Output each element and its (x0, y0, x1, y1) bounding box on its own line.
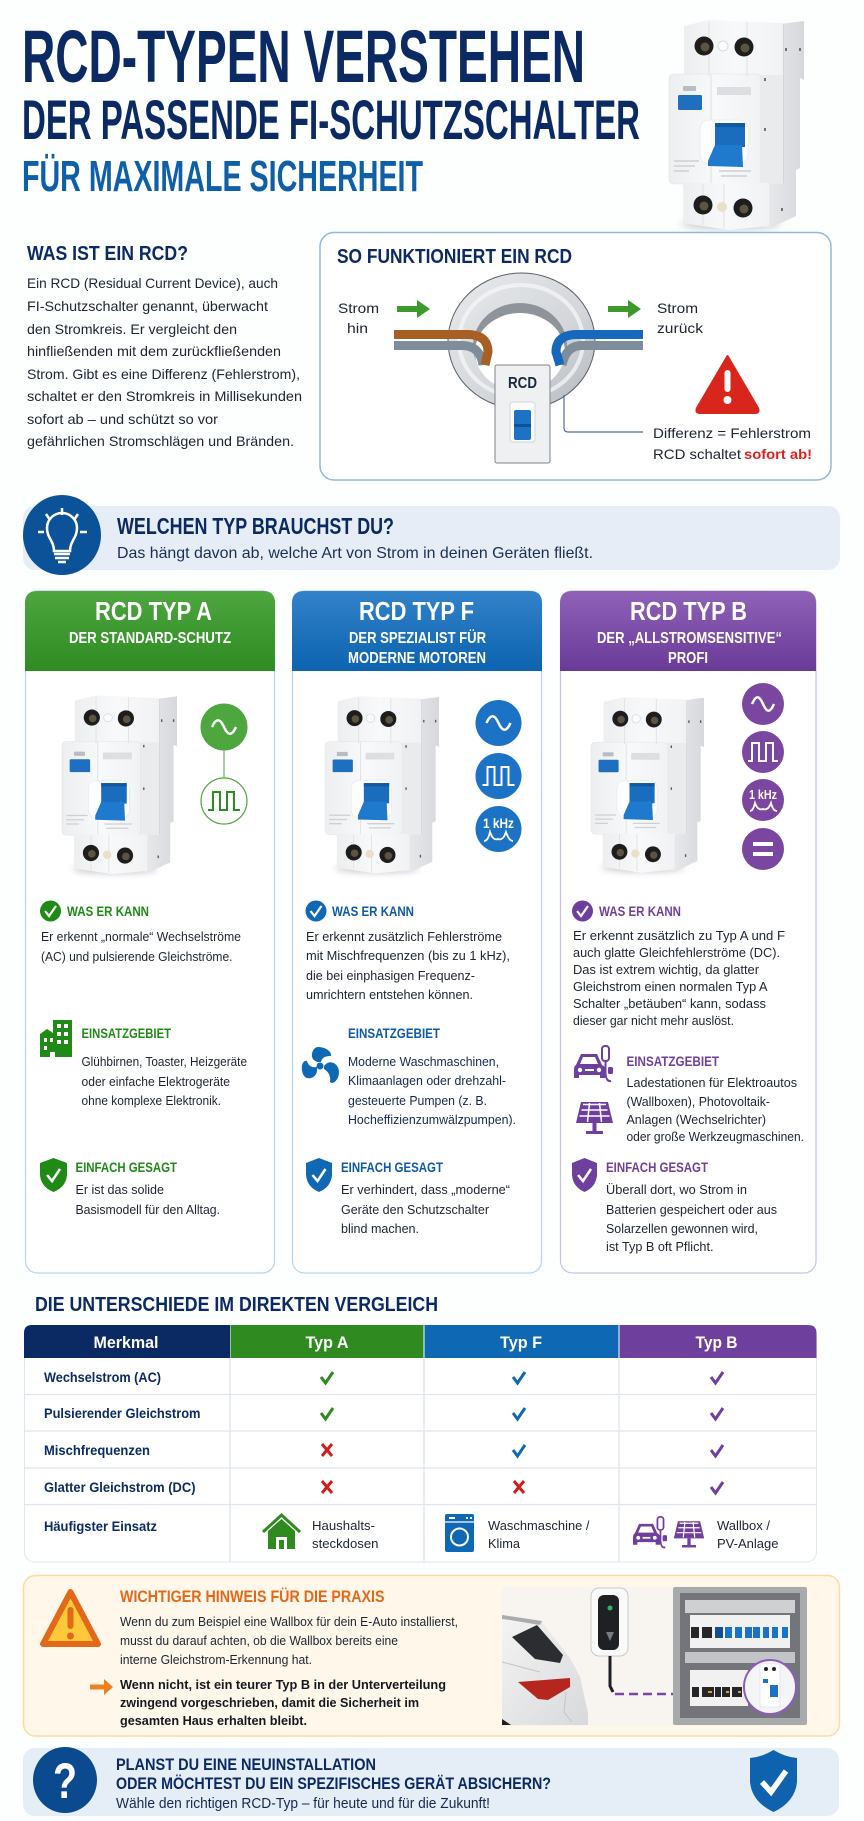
text block: was ist ein RCD (27, 242, 302, 449)
diagram: RCD module: RCD (508, 375, 537, 392)
icon: shield (306, 1158, 332, 1192)
illustration: wallbox and distribution board (502, 1587, 807, 1726)
block: was er kann Typ A: (AC) und pulsierende Gleichströme. (41, 949, 232, 964)
block: einfach gesagt Typ B: Batterien gespeichert oder aus (606, 1202, 777, 1217)
icon: red warning triangle (696, 356, 759, 413)
call to action text: Wähle den richtigen RCD-Typ – für heute und für die Zukunft! (116, 1796, 490, 1812)
icon: e-car (574, 1046, 613, 1081)
icon: fan (302, 1047, 339, 1083)
block: Einsatzgebiet Typ B: (Wallboxen), Photovoltaik- (626, 1094, 770, 1109)
row: Häufigster Einsatz: steckdosen (312, 1536, 378, 1551)
icon: AC, pulsed and mixed frequency waveforms: 1 kHz (483, 816, 514, 831)
hint bold text (120, 1677, 446, 1728)
block: was er kann Typ B (572, 900, 785, 1028)
panel: so funktioniert ein RCD (320, 232, 831, 480)
block: Einsatzgebiet Typ A (40, 1020, 247, 1108)
icon: breaker Typ F (325, 696, 439, 874)
block: Einsatzgebiet Typ F: Klimaanlagen oder drehzahl- (348, 1073, 506, 1088)
header: Typ F: MODERNE MOTOREN (348, 650, 486, 667)
row: Häufigster Einsatz: Häufigster Einsatz (44, 1519, 157, 1534)
callout: fault current: RCD schaltet (653, 446, 741, 462)
row: Häufigster Einsatz: PV-Anlage (717, 1536, 778, 1551)
hint bold text: Wenn nicht, ist ein teurer Typ B in der Unterverteilung (120, 1677, 446, 1692)
dashed connection (615, 1693, 699, 1695)
row: Wechselstrom: Wechselstrom (AC) (44, 1370, 161, 1385)
diagram: toroid ring (448, 273, 595, 409)
block: Einsatzgebiet Typ B: Ladestationen für Elektroautos (626, 1075, 797, 1090)
block: was er kann Typ B: Schalter „betäuben“ kann, sodass (573, 996, 766, 1011)
block: einfach gesagt Typ A: EINFACH GESAGT (76, 1159, 177, 1175)
block: einfach gesagt Typ F: EINFACH GESAGT (341, 1159, 443, 1175)
label: Strom hin: Strom (338, 300, 379, 316)
block: Einsatzgebiet Typ F: EINSATZGEBIET (348, 1025, 440, 1041)
block: einfach gesagt Typ A (40, 1158, 220, 1217)
block: Einsatzgebiet Typ A: ohne komplexe Elektronik. (82, 1093, 221, 1108)
icon: breaker Typ B (591, 697, 704, 873)
header: Typ F (292, 591, 542, 671)
arrow: current in (397, 300, 430, 318)
block: was er kann Typ B: auch glatte Gleichfehlerströme (DC). (573, 945, 780, 960)
icon: solar panel (576, 1102, 613, 1134)
header: Typ B: PROFI (668, 650, 708, 667)
row: Glatter Gleichstrom (44, 1480, 723, 1495)
icon: e-car (633, 1517, 667, 1547)
text block: was ist ein RCD: sofort ab – und schützt so vor (27, 411, 218, 427)
label: Strom zurück (657, 300, 704, 336)
heading: comparison: DIE UNTERSCHIEDE IM DIREKTEN VERGLEICH (35, 1294, 438, 1316)
row: Pulsierender Gleichstrom (44, 1406, 723, 1421)
header: Typ A (25, 591, 275, 671)
callout: fault current (653, 425, 812, 462)
block: einfach gesagt Typ F: Geräte den Schutzschalter (341, 1202, 490, 1217)
hint bold text: gesamten Haus erhalten bleibt. (120, 1713, 307, 1728)
highlighted RCD (744, 1660, 796, 1714)
title (22, 15, 640, 201)
block: Einsatzgebiet Typ B (574, 1046, 804, 1144)
header: Typ F: RCD TYP F (359, 598, 474, 626)
header: Typ B: DER „ALLSTROMSENSITIVE“ (597, 630, 782, 647)
icon: breaker Typ A (62, 695, 177, 874)
icon: AC and pulsed waveforms (200, 704, 248, 824)
text block: was ist ein RCD: schaltet er den Stromkreis in Millisekunden (27, 388, 302, 404)
row: Mischfrequenzen: Mischfrequenzen (44, 1443, 150, 1458)
text block: was ist ein RCD: Strom. Gibt es eine Differenz (Fehlerstrom), (27, 366, 300, 382)
block: was er kann Typ F (306, 900, 510, 1002)
block: was er kann Typ F: die bei einphasigen Frequenz- (306, 968, 475, 983)
block: Einsatzgebiet Typ F: Hocheffizienzumwälzpumpen). (348, 1112, 516, 1127)
wallbox (591, 1588, 628, 1692)
banner text (117, 513, 593, 562)
icon: shield check (750, 1750, 797, 1812)
label: Strom zurück: Strom (657, 300, 698, 316)
label: Strom hin: hin (347, 320, 368, 336)
block: was er kann Typ F: mit Mischfrequenzen (bis zu 1 kHz), (306, 948, 510, 963)
icon: shield (40, 1158, 67, 1192)
hint text: Wenn du zum Beispiel eine Wallbox für dein E-Auto installierst, (120, 1614, 458, 1629)
block: Einsatzgebiet Typ B: Anlagen (Wechselrichter) (626, 1112, 766, 1127)
diagram: incoming wires (394, 334, 488, 365)
row: Pulsierender Gleichstrom: Pulsierender Gleichstrom (44, 1406, 200, 1421)
block: einfach gesagt Typ F (306, 1158, 510, 1236)
block: was er kann Typ A: WAS ER KANN (67, 903, 149, 919)
block: was er kann Typ A (40, 900, 241, 964)
label: Strom hin (338, 300, 379, 336)
hint text: musst du darauf achten, ob die Wallbox bereits eine (120, 1633, 398, 1648)
block: Einsatzgebiet Typ F: gesteuerte Pumpen (z. B. (348, 1093, 487, 1108)
arrow: current out (608, 300, 641, 318)
block: was er kann Typ F: WAS ER KANN (332, 903, 414, 919)
icon: question mark: ? (53, 1753, 77, 1809)
icon: shield (572, 1158, 597, 1192)
block: Einsatzgebiet Typ B: oder große Werkzeugmaschinen. (626, 1129, 804, 1144)
hint text (120, 1587, 458, 1667)
block: Einsatzgebiet Typ A: EINSATZGEBIET (82, 1025, 171, 1041)
table header: Typ F (500, 1333, 542, 1352)
block: was er kann Typ B: Er erkennt zusätzlich zu Typ A und F (573, 928, 785, 943)
header: Typ A: DER STANDARD-SCHUTZ (69, 630, 231, 647)
callout: fault current: Differenz = Fehlerstrom (653, 425, 811, 441)
block: was er kann Typ B: dieser gar nicht mehr auslöst. (573, 1013, 734, 1028)
block: einfach gesagt Typ B (572, 1158, 777, 1254)
block: einfach gesagt Typ B: ist Typ B oft Pflicht. (606, 1239, 714, 1254)
block: einfach gesagt Typ A: Er ist das solide (76, 1182, 164, 1197)
banner text: WELCHEN TYP BRAUCHST DU? (117, 513, 394, 539)
block: was er kann Typ B: WAS ER KANN (599, 903, 681, 919)
row: Häufigster Einsatz: Klima (488, 1536, 521, 1551)
icon: AC, pulsed and mixed frequency waveforms (476, 700, 522, 852)
row: Glatter Gleichstrom: Glatter Gleichstrom (DC) (44, 1480, 196, 1495)
banner text: Das hängt davon ab, welche Art von Strom in deinen Geräten fließt. (117, 545, 593, 562)
icon: AC, pulsed, mixed frequency and DC waveforms (742, 683, 784, 870)
icon: light bulb (23, 495, 101, 575)
car rear (502, 1615, 588, 1725)
table header: Typ A (306, 1333, 348, 1352)
block: einfach gesagt Typ B: EINFACH GESAGT (606, 1159, 708, 1175)
text block: was ist ein RCD: hinfließenden mit dem zurückfließenden (27, 343, 281, 359)
icon: washing machine (445, 1514, 474, 1552)
block: was er kann Typ B: Gleichstrom einen normalen Typ A (573, 979, 768, 994)
call to action text: ODER MÖCHTEST DU EIN SPEZIFISCHES GERÄT ABSICHERN? (116, 1774, 551, 1793)
table header (24, 1325, 816, 1358)
block: einfach gesagt Typ F: blind machen. (341, 1221, 419, 1236)
text block: was ist ein RCD: FI-Schutzschalter genannt, überwacht (27, 298, 268, 314)
diagram: outgoing wires (556, 334, 643, 365)
panel: RCD Typ A (25, 591, 275, 1273)
icon: building (40, 1020, 72, 1057)
header: Typ A: RCD TYP A (95, 598, 212, 626)
block: einfach gesagt Typ F: Er verhindert, dass „moderne“ (341, 1182, 510, 1197)
banner: welchen Typ brauchst du (23, 495, 840, 575)
row: Häufigster Einsatz (44, 1514, 778, 1552)
block: einfach gesagt Typ A: Basismodell für den Alltag. (76, 1202, 220, 1217)
block: Einsatzgebiet Typ F (302, 1025, 516, 1127)
panel: RCD Typ B (560, 591, 816, 1273)
header: Typ B (560, 591, 816, 671)
block: was er kann Typ B: Das ist extrem wichtig, da glatter (573, 962, 760, 977)
block: einfach gesagt Typ B: Überall dort, wo Strom in (606, 1182, 747, 1197)
block: was er kann Typ F: Er erkennt zusätzlich Fehlerströme (306, 929, 502, 944)
panel: RCD Typ F (292, 591, 542, 1273)
call to action text: PLANST DU EINE NEUINSTALLATION (116, 1755, 376, 1774)
block: einfach gesagt Typ B: Solarzellen gewonnen wird, (606, 1221, 758, 1236)
distribution board (673, 1587, 807, 1725)
panel: wichtiger Hinweis (24, 1576, 840, 1736)
block: Einsatzgebiet Typ F: Moderne Waschmaschinen, (348, 1054, 499, 1069)
header: Typ B: RCD TYP B (630, 598, 747, 626)
icon: warning triangle (43, 1592, 98, 1644)
diagram: RCD module (495, 365, 550, 463)
block: Einsatzgebiet Typ B: EINSATZGEBIET (626, 1053, 719, 1069)
label: Strom zurück: zurück (657, 320, 704, 336)
block: was er kann Typ A: Er erkennt „normale“ Wechselströme (41, 929, 241, 944)
text block: was ist ein RCD: gefährlichen Stromschlägen und Bränden. (27, 433, 294, 449)
panel heading: SO FUNKTIONIERT EIN RCD (337, 246, 572, 268)
block: was er kann Typ F: umrichtern entstehen können. (306, 987, 473, 1002)
call to action text (116, 1755, 551, 1812)
row: Häufigster Einsatz: Haushalts- (312, 1518, 375, 1533)
icon: solar panel (674, 1521, 704, 1547)
icon: house (263, 1515, 300, 1549)
table header: Merkmal (94, 1333, 158, 1352)
hint bold text: zwingend vorgeschrieben, damit die Sicherheit im (120, 1695, 419, 1710)
header: Typ F: DER SPEZIALIST FÜR (349, 628, 486, 647)
icon: hero RCD breaker (669, 20, 804, 230)
icon: question mark (33, 1747, 97, 1813)
comparison table (24, 1325, 816, 1562)
hint text: interne Gleichstrom-Erkennung hat. (120, 1652, 312, 1667)
text block: was ist ein RCD: Ein RCD (Residual Current Device), auch (27, 275, 278, 291)
row: Wechselstrom (44, 1370, 723, 1385)
table header: Typ B (696, 1333, 738, 1352)
title: FÜR MAXIMALE SICHERHEIT (22, 152, 423, 201)
row: Häufigster Einsatz: Waschmaschine / (488, 1518, 590, 1533)
icon: AC, pulsed, mixed frequency and DC waveforms: 1 kHz (749, 787, 777, 802)
block: Einsatzgebiet Typ A: oder einfache Elektrogeräte (82, 1074, 230, 1089)
hint text: WICHTIGER HINWEIS FÜR DIE PRAXIS (120, 1587, 384, 1606)
block: Einsatzgebiet Typ A: Glühbirnen, Toaster, Heizgeräte (82, 1054, 247, 1069)
text block: was ist ein RCD: den Stromkreis. Er vergleicht den (27, 321, 237, 337)
row: Mischfrequenzen (44, 1443, 723, 1458)
row: Häufigster Einsatz: Wallbox / (717, 1518, 770, 1533)
text block: was ist ein RCD: WAS IST EIN RCD? (27, 242, 188, 265)
arrow: orange (90, 1679, 113, 1695)
connector line (564, 395, 643, 432)
banner: call to action (23, 1747, 839, 1816)
callout: fault current: sofort ab! (744, 446, 812, 462)
